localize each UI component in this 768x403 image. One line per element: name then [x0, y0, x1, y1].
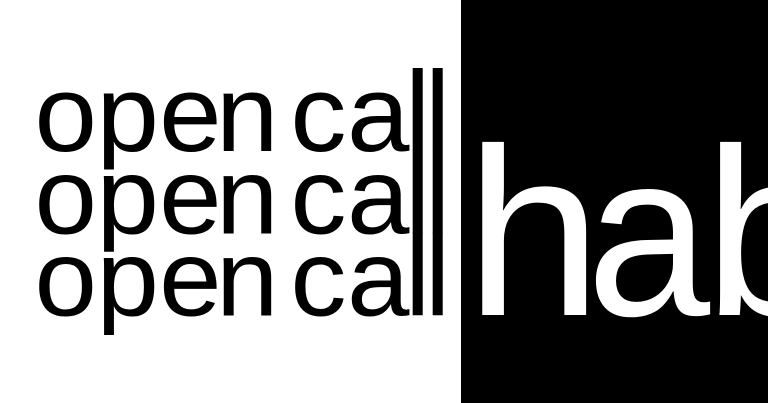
panel: white background — [0, 0, 461, 403]
heading: repeated open call — [39, 68, 443, 335]
letter h: h — [465, 99, 602, 366]
wordmark: hab — [465, 99, 768, 366]
heading line 3: ll — [405, 214, 450, 340]
heading line 3: open ca — [34, 218, 410, 339]
letter a: a — [586, 104, 710, 365]
heading line 1: ll — [405, 49, 450, 176]
heading line 2: ll — [405, 131, 450, 258]
panel: black background — [461, 0, 768, 403]
heading line 1: open ca — [34, 54, 410, 175]
heading line 2: open ca — [34, 136, 410, 257]
